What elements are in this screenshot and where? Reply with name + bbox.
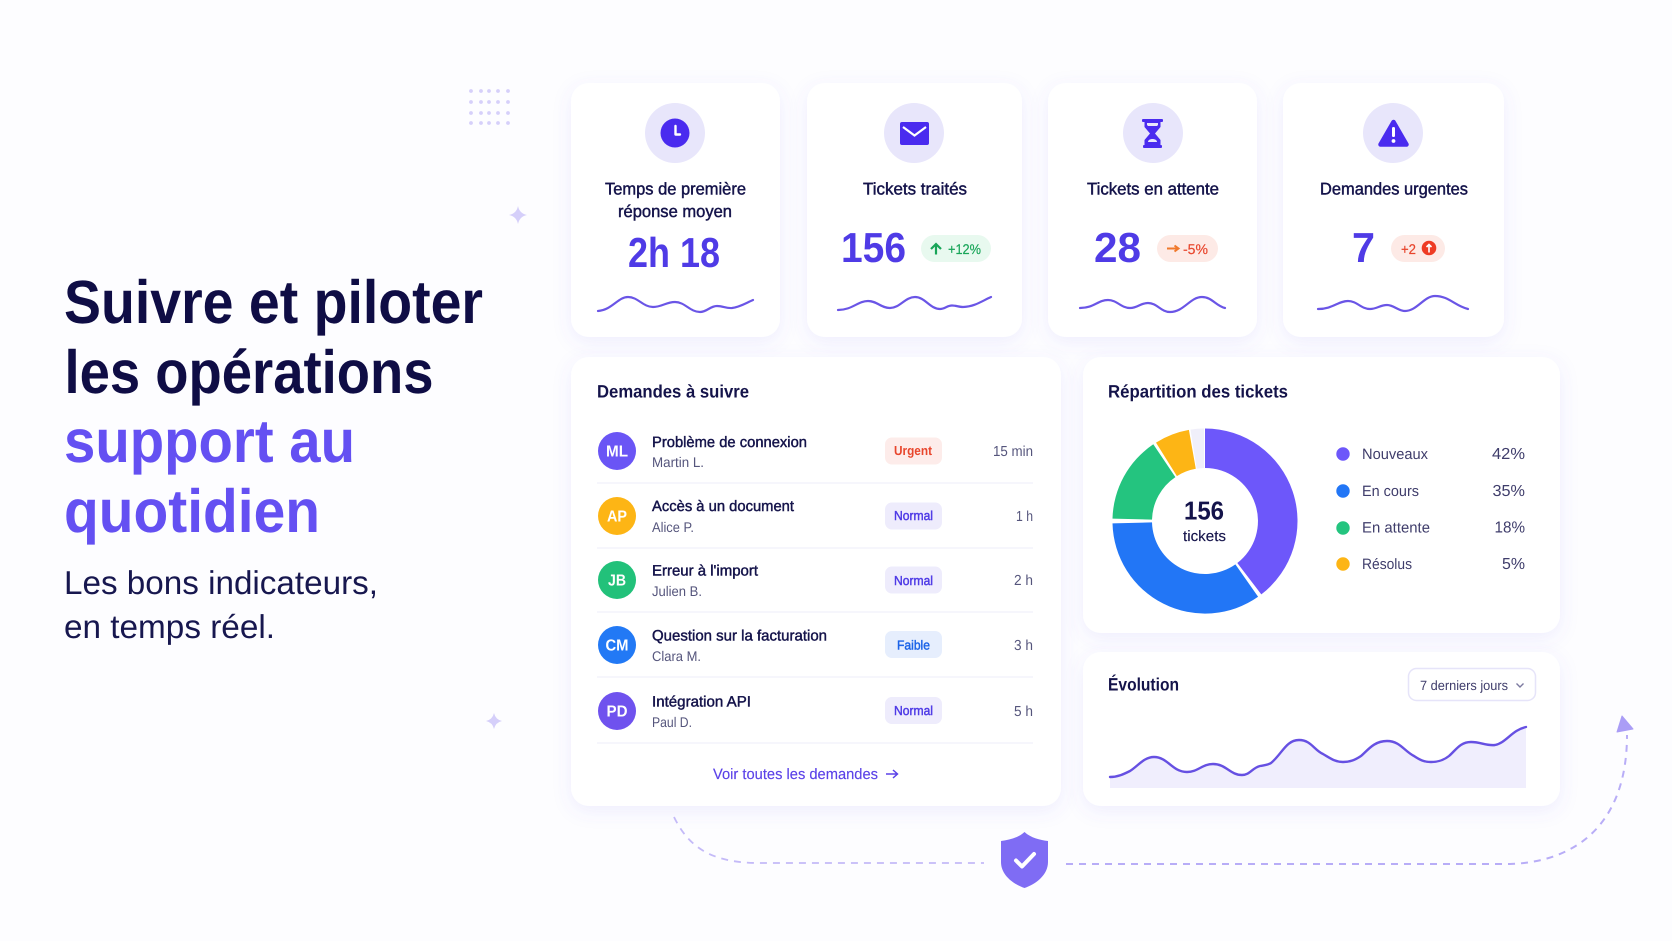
icon: envelope [884,103,944,163]
heading: Évolution [1108,674,1179,694]
KPI label: Demandes urgentes [1320,180,1468,198]
subtitle: en temps réel. [64,608,275,645]
icon: clock [645,103,705,163]
row: document access: Alice P. [652,519,694,535]
row: API integration: Paul D. [652,714,692,730]
row: billing question: 3 h [1014,638,1033,654]
legend: Nouveaux [1362,446,1428,463]
legend: 35% [1492,483,1525,500]
panel: KPI urgent requests [1283,83,1504,337]
icon: warning triangle [1363,103,1423,163]
row: import error: Erreur à l'import [652,562,759,580]
legend: 42% [1492,446,1525,463]
panel: KPI pending tickets [1048,83,1257,337]
icon: hourglass [1123,103,1183,163]
panel: ticket distribution [1083,357,1560,633]
row: API integration [598,692,1033,730]
sparkline [838,297,991,310]
row: document access: Normal [894,508,933,523]
row: import error: JB [608,572,626,590]
title: les opérations [64,338,434,406]
decorative star bottom [486,713,502,729]
legend: Résolus [1362,556,1412,573]
panel: evolution [1083,652,1560,806]
KPI label: Tickets traités [863,180,967,198]
title: quotidien [64,477,320,545]
link: see all requests: Voir toutes les demandes [713,766,878,783]
row: document access: 1 h [1016,509,1033,525]
legend: 18% [1494,520,1525,536]
row: connection problem: ML [606,444,628,460]
row: connection problem: Urgent [894,443,933,458]
title: support au [64,407,355,475]
panel: KPI first response time [571,83,780,337]
donut centre total: tickets [1183,528,1226,545]
donut chart [1112,428,1298,614]
donut centre total [1183,496,1226,545]
title: Suivre et piloter [64,268,483,336]
row: document access: AP [607,508,627,526]
row: billing question: Clara M. [652,648,701,664]
KPI value: 7 [1352,224,1375,271]
heading: Répartition des tickets [1108,382,1288,402]
trend badge [1157,235,1218,262]
subtitle: Les bons indicateurs, [64,564,378,601]
subtitle [64,564,378,645]
donut centre total: 156 [1184,496,1224,526]
row: document access: Accès à un document [652,498,795,515]
row: billing question [598,626,1033,664]
sparkline [1318,296,1468,311]
decorative dot grid [469,89,510,125]
row: connection problem: Problème de connexion [652,434,807,451]
trend badge [1391,235,1445,262]
title [64,268,483,545]
panel: KPI tickets processed [807,83,1022,337]
trend badge [921,235,991,262]
icon: shield check [1001,832,1048,888]
heading: Demandes à suivre [597,382,749,402]
KPI value: 28 [1094,224,1141,271]
trend badge: +2 [1401,241,1416,257]
row: billing question: CM [606,638,628,654]
row: API integration: Intégration API [652,694,751,710]
legend [1336,446,1525,573]
row: connection problem [598,432,1033,470]
row: billing question: Faible [897,638,930,652]
sparkline [598,297,753,312]
KPI value: 156 [841,224,906,271]
row: API integration: PD [606,704,628,720]
row: connection problem: 15 min [993,444,1033,460]
row: import error [598,561,1033,599]
row: import error: Normal [894,573,933,588]
KPI label [605,180,746,221]
arrow: dashed connector right with arrowhead [1066,716,1633,864]
row: import error: Julien B. [652,583,702,599]
KPI label: réponse moyen [618,202,732,221]
KPI value: 2h 18 [628,229,720,276]
area chart [1110,727,1526,788]
legend: En cours [1362,483,1419,500]
KPI label: Tickets en attente [1087,180,1219,198]
sparkline [1080,297,1225,312]
period dropdown: 7 derniers jours [1420,678,1508,693]
row: document access [598,497,1033,535]
arrow: dashed connector left [674,817,984,863]
row: billing question: Question sur la facturation [652,628,827,644]
panel: requests to follow [571,357,1061,806]
row: API integration: 5 h [1014,704,1033,720]
legend: 5% [1502,556,1525,573]
KPI label: Temps de première [605,180,746,198]
decorative star top [509,206,527,224]
period dropdown [1408,668,1536,700]
legend: En attente [1362,520,1430,536]
trend badge: -5% [1183,241,1208,257]
row: API integration: Normal [894,703,933,718]
row: import error: 2 h [1014,573,1033,589]
trend badge: +12% [948,241,981,257]
row: connection problem: Martin L. [652,454,704,470]
